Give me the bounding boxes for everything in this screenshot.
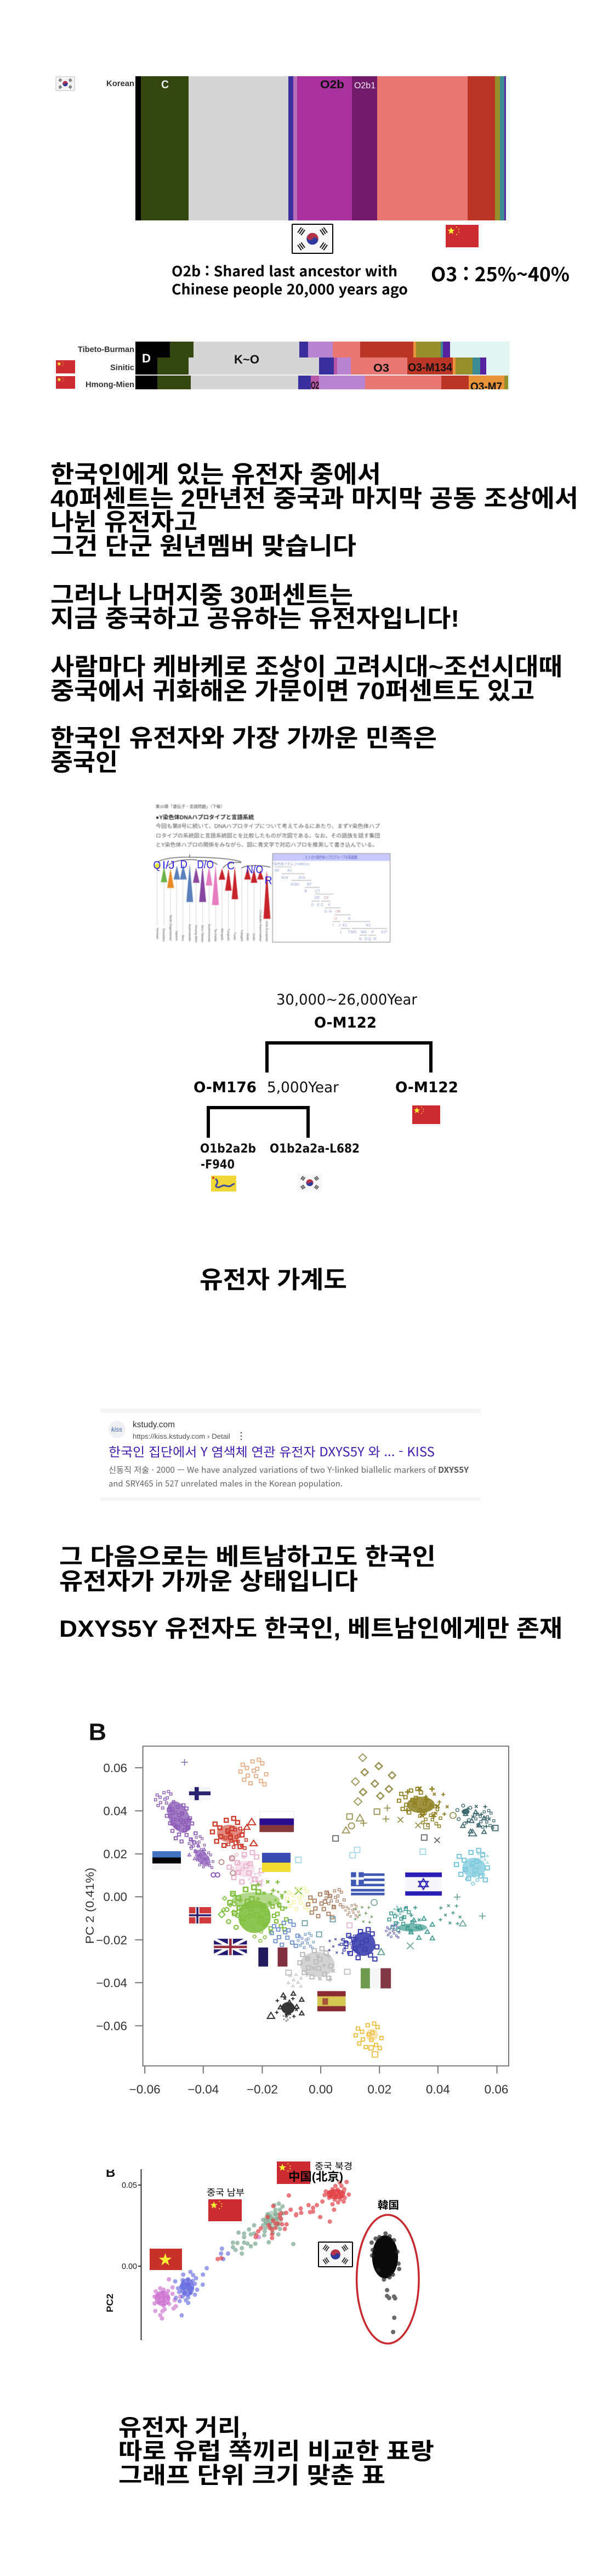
figure: Japanese article with Y haplotype tree: CT [315,889,321,893]
figure: Japanese article with Y haplotype tree: Yukaghir [240,929,243,941]
icon: Chinese flag, Sinitic row [56,360,75,373]
figure: Japanese article with Y haplotype tree: 今回も第8号に続いて、DNAハプロタイプについて考えてみるにあたり、まずY染色体ハプ [156,823,380,830]
y axis labels: 0.06 [103,1761,127,1775]
chart: Korean haplogroup bar: O2b [320,78,344,91]
points: green southern Chinese cluster [233,2180,332,2254]
icon: kebab menu [241,1432,242,1440]
text block: 40 percent paragraph: 나뉜 유전자고 [50,509,197,536]
text block: closest people paragraph: 중국인 [50,749,118,776]
cluster: blue steel group [270,1917,335,1949]
result snippet [109,1464,469,1489]
icon: Vietnam flag [150,2249,182,2270]
x axis labels: 0.02 [367,2083,391,2096]
figure: Japanese article with Y haplotype tree: A1b [298,876,305,880]
cluster: pale yellow group [286,1886,312,1911]
figure: Japanese article with Y haplotype tree: DE [315,897,320,900]
figure: Japanese article with Y haplotype tree: O [365,937,368,941]
row labels [78,345,134,389]
icon: Russia flag [259,1811,294,1832]
text block: closest people paragraph: 한국인 유전자와 가장 가까운 민족은 [50,725,437,752]
figure: Japanese article with Y haplotype tree: H [329,910,332,914]
caption: O2b shared ancestor: O2b : Shared last ancestor with [172,260,397,281]
icon: small Korean flag [56,77,75,90]
figure: Japanese article with Y haplotype tree: NO [361,930,367,934]
y axis tick labels: 0.00 [122,2262,137,2271]
figure: Japanese article with Y haplotype tree: Mongolic [220,928,223,941]
icon: Estonia flag [152,1851,181,1870]
figure: Japanese article with Y haplotype tree: Uralic [252,933,255,941]
cluster: teal group [385,1894,486,1949]
cluster: pink group [219,1851,264,1886]
figure: Japanese article with Y haplotype tree: E [317,903,320,907]
panel: search result card [100,1409,481,1501]
y axis tick labels: 0.05 [122,2181,137,2190]
figure: Japanese article with Y haplotype tree: D [180,858,187,871]
cluster: light blue group [295,1847,490,1885]
chart: Y-DNA family tree [194,991,458,1293]
panel letter B, cropped: B [106,2165,115,2180]
icon: Greece flag [351,1872,384,1895]
label: northern China Beijing: 중국 북경 [315,2161,352,2171]
y axis labels: 0.04 [103,1805,127,1818]
node: O-M176: O-M176 [194,1079,257,1096]
figure: Japanese article with Y haplotype tree: CF [324,897,329,900]
node: O1b2a2a-L682: O1b2a2a-L682 [270,1142,360,1156]
figure: Japanese article with Y haplotype tree: Sino-Tibetan [201,925,204,943]
connector: lower bracket [208,1108,308,1138]
red ellipse highlight [357,2215,419,2344]
icon: France flag [258,1948,287,1967]
y axis labels: 0.00 [103,1890,127,1904]
text block: Vietnam comparison [59,1544,562,1642]
row labels: Tibeto-Burman [78,345,134,354]
icon: Qing dragon flag [211,1176,236,1191]
figure: Japanese article with Y haplotype tree: T [348,930,351,934]
cluster: peach squares [181,1758,268,1786]
figure: Japanese article with Y haplotype tree: Japanic [174,930,178,941]
caption: O2b shared ancestor: Chinese people 20,000 years ago [172,279,408,299]
text block: Vietnam comparison: 그 다음으로는 베트남하고도 한국인 [59,1544,436,1570]
y axis labels: −0.06 [96,2019,127,2033]
chart: East Asian PCA scatter plot [105,2161,419,2344]
text block: 40 percent paragraph: 한국인에게 있는 유전자 중에서 [50,461,381,488]
x axis labels: 0.00 [309,2083,333,2096]
points: black Korean cluster [372,2233,399,2332]
icon: Spain flag [317,1991,346,2011]
figure: Japanese article with Y haplotype tree: Ainu [181,935,184,941]
figure: Japanese article with Y haplotype tree: F [328,903,331,907]
figure: Japanese article with Y haplotype tree: Yenisian [155,928,158,939]
figure: Japanese article with Y haplotype tree: Nivkh [246,933,249,941]
cluster: dark teal group [456,1804,498,1836]
figure: Japanese article with Y haplotype tree: B [304,889,307,893]
chart: Korean haplogroup bar [135,76,510,220]
year label: root: 30,000~26,000Year [276,991,418,1008]
row labels: Hmong-Mien [86,380,134,389]
icon: kiss logo [109,1421,126,1438]
y axis labels: 0.02 [103,1847,127,1861]
figure: Japanese article with Y haplotype tree: IJ [334,917,337,921]
chart: Korean haplogroup bar: C [161,78,169,91]
figure: Japanese article with Y haplotype tree: Q [368,937,372,941]
text block: naturalized clans paragraph: 사람마다 케바케로 조상이 고려시대~조선시대때 [50,654,562,680]
points: magenta Vietnamese cluster [155,2237,259,2318]
chart: Korean haplogroup bar: O2b1 [354,81,376,90]
caption: O2b shared ancestor [172,260,408,299]
chart: European PCA scatter plot [84,1719,509,2096]
site name: kstudy.com [133,1420,175,1429]
figure: Japanese article with Y haplotype tree: I [332,924,333,928]
text block: 40 percent paragraph [50,461,578,560]
icon: Ukraine flag [262,1853,291,1872]
text block: naturalized clans paragraph: 중국에서 귀화해온 가문이면 70퍼센트도 있고 [50,678,534,705]
x axis labels [129,2083,508,2096]
figure: Japanese article with Y haplotype tree: L [340,930,342,934]
icon: Korean flag in plot [318,2242,353,2267]
figure: Japanese article with Y haplotype tree: D [311,903,314,907]
figure: Japanese article with Y haplotype tree: K1 [343,924,347,928]
year label: 5,000: 5,000Year [267,1079,339,1096]
cluster: mixed green crosses [347,1899,377,1928]
text block: closing caption: 따로 유럽 쪽끼리 비교한 표랑 [118,2438,434,2464]
node: O1b2a2b-F940 [200,1142,256,1172]
y axis labels: −0.04 [96,1976,127,1990]
figure: Japanese article with Y haplotype tree: N/O [246,863,263,876]
x axis labels: 0.06 [485,2083,508,2096]
text block: Vietnam comparison: DXYS5Y 유전자도 한국인, 베트남인에게만 존재 [59,1616,562,1642]
figure: Japanese article with Y haplotype tree: C [227,860,235,872]
figure: Japanese article with Y haplotype tree: Turkic [233,932,236,940]
figure: Japanese article with Y haplotype tree: BT [307,883,312,887]
y axis [138,2169,141,2340]
figure: Japanese article with Y haplotype tree [153,804,390,943]
figure: Japanese article with Y haplotype tree: Tungusic [226,928,230,941]
cluster: brown group [306,1888,360,1919]
y axis title: PC2 [105,2294,115,2312]
figure: Japanese article with Y haplotype tree: Austronesian [207,924,211,942]
cluster: gray French group [286,1947,350,1987]
figure: Japanese article with Y haplotype tree: K [348,917,351,921]
icon: Norway flag [189,1907,211,1924]
cluster: gold squares [354,2022,383,2057]
node: O1b2a2b-F940: O1b2a2b [200,1142,256,1156]
plot frame and ticks [135,1746,509,2074]
connector: upper bracket [267,1043,431,1073]
y axis labels [96,1761,127,2033]
figure: Japanese article with Y haplotype tree: R [265,874,272,887]
icon: Italy flag [361,1968,391,1988]
figure: Japanese article with Y haplotype tree: North-Dagestanian [168,915,172,941]
node: O-M122 root: O-M122 [314,1014,377,1031]
text block: 40 percent paragraph: 40퍼센트는 2만년전 중국과 마지막 공동 조상에서 [50,485,578,512]
figure: Japanese article with Y haplotype tree: G [325,910,327,914]
icon: Chinese flag, Hmong-Mien row [56,376,75,389]
figure: Japanese article with Y haplotype tree: Austroasiatic [188,924,191,942]
node: O1b2a2b-F940: -F940 [201,1158,235,1172]
figure: Japanese article with Y haplotype tree: IJK [335,910,341,914]
text block: Vietnam comparison: 유전자가 가까운 상태입니다 [59,1569,358,1595]
figure: Japanese article with Y haplotype tree: ヒトのY染色体ハプログループの系統樹 [305,855,357,860]
text block: closing caption [118,2415,434,2488]
icon: Korean flag on tree [297,1174,322,1191]
figure: Japanese article with Y haplotype tree: 第10章「遺伝子・言語問題」（下候） [156,804,225,809]
x axis labels: −0.06 [129,2083,161,2096]
figure: Japanese article with Y haplotype tree: Dravidian [162,928,165,941]
points: blue Vietnamese cluster [175,2249,228,2316]
figure: Japanese article with Y haplotype tree: K2 [366,924,371,928]
chart: Tibeto-Burman, Sinitic, Hmong-Mien bars: O3-M7 [470,381,502,393]
caption: family tree title: 유전자 가계도 [200,1267,347,1293]
label: Korea in Chinese characters: 韓国 [378,2199,399,2211]
icon: Chinese flag [446,225,479,247]
figure: Japanese article with Y haplotype tree: K2* [381,930,388,934]
y axis title: PC 2 (0.41%) [84,1868,96,1944]
label: Korean: Korean [106,79,134,88]
chart: Tibeto-Burman, Sinitic, Hmong-Mien bars: O3 [373,362,389,375]
text block: naturalized clans paragraph [50,654,562,705]
figure: Japanese article with Y haplotype tree: とY染色体ハプロの関係をみながら、図に青文字で対応ハプロを推測して書き込んでいる。 [156,842,378,848]
figure: Japanese article with Y haplotype tree: J [339,924,340,928]
points: red northern Chinese cluster [218,2182,349,2259]
figure: Japanese article with Y haplotype tree: I/J [162,859,175,872]
figure: Japanese article with Y haplotype tree: Y染色体アダム (Y-MRCA) [272,862,309,866]
figure: Japanese article with Y haplotype tree: C [321,903,323,907]
figure: Japanese article with Y haplotype tree: ロタイプの系統図と言語系統図とを比較したものが次図である。なお、その語族を話す集団 [156,832,380,839]
x axis labels: −0.02 [247,2083,278,2096]
figure: Japanese article with Y haplotype tree: Hmong-Mien [194,925,197,943]
cluster: green British group [218,1880,302,1942]
figure: Japanese article with Y haplotype tree: A1b1 [291,883,300,887]
chart: Tibeto-Burman, Sinitic, Hmong-Mien bars: O2 [311,380,319,391]
figure: Japanese article with Y haplotype tree: A1a [281,876,288,880]
label: China (Beijing) in Chinese: 中国(北京) [288,2171,343,2183]
chart: Tibeto-Burman, Sinitic, Hmong-Mien bars: K~O [234,353,259,366]
node: O-M122 branch: O-M122 [395,1079,458,1096]
y axis labels: −0.02 [96,1933,127,1947]
chart: Tibeto-Burman, Sinitic, Hmong-Mien bars: O3-M134 [408,361,452,374]
x axis labels: −0.04 [187,2083,219,2096]
label: southern China: 중국 남부 [207,2188,244,2198]
icon: Chinese flag on tree [412,1105,440,1124]
figure: Japanese article with Y haplotype tree: R [373,937,377,941]
text block: closest people paragraph [50,725,437,776]
callout: O3 share: O3 : 25%~40% [431,259,570,287]
text block: 30 percent paragraph: 지금 중국하고 공유하는 유전자입니다! [50,605,459,632]
x axis labels: 0.04 [426,2083,450,2096]
text block: 40 percent paragraph: 그건 단군 원년멤버 맞습니다 [50,533,356,560]
scatter points [155,2180,419,2344]
figure: Japanese article with Y haplotype tree: A0 [275,869,279,873]
cluster: olive Turkish group [333,1754,456,1843]
panel letter B: B [89,1719,106,1746]
figure: Japanese article with Y haplotype tree: P [372,930,374,934]
cluster: navy group [328,1928,384,1961]
figure: Japanese article with Y haplotype tree: ●Y染色体DNAハプロタイプと言語系統 [156,814,254,821]
chart: Tibeto-Burman, Sinitic, Hmong-Mien bars [135,342,510,393]
cluster: red Russian group [211,1817,257,1849]
cluster: black triangles [268,1991,304,2022]
y axis tick labels [122,2181,137,2271]
figure: Japanese article with Y haplotype tree: Indo-European [265,921,268,941]
icon: kiss logo: kiss [111,1426,122,1433]
result snippet: 신동직 저술 · 2000 — We have analyzed variations of two Y-linked biallelic markers of DXYS5Y [109,1464,469,1476]
text block: closing caption: 유전자 거리, [118,2415,248,2441]
figure: Japanese article with Y haplotype tree: MS [351,930,357,934]
icon: UK flag [214,1939,247,1955]
cluster: purple Finnish band [155,1790,220,1877]
icon: Korean flag with frame [292,224,333,254]
text block: 30 percent paragraph [50,582,459,632]
icon: Chinese flag, southern China [208,2199,242,2221]
result snippet: and SRY465 in 527 unrelated males in the Korean population. [109,1478,343,1489]
icon: Chinese flag, Beijing [277,2161,310,2184]
chart: Tibeto-Burman, Sinitic, Hmong-Mien bars: D [142,351,151,365]
site url: https://kiss.kstudy.com › Detail [133,1432,230,1440]
figure: Japanese article with Y haplotype tree: A1 [287,869,292,873]
figure: Japanese article with Y haplotype tree: N [359,937,362,941]
text block: 30 percent paragraph: 그러나 나머지중 30퍼센트는 [50,582,353,609]
figure: Japanese article with Y haplotype tree: Tai-Kadai [214,928,217,941]
text block: closing caption: 그래프 단위 크기 맞춘 표 [118,2462,385,2488]
figure: Japanese article with Y haplotype tree: D/O [197,859,214,871]
figure: Japanese article with Y haplotype tree: Q [153,859,161,872]
icon: Israel flag [405,1872,442,1896]
icon: Finland flag [189,1787,211,1800]
row labels: Sinitic [110,363,134,372]
figure: Japanese article with Y haplotype tree: Chukotko-Kamchatkan [258,910,261,941]
result title: 한국인 집단에서 Y 염색체 연관 유전자 DXYS5Y 와 ... - KISS [109,1442,435,1460]
